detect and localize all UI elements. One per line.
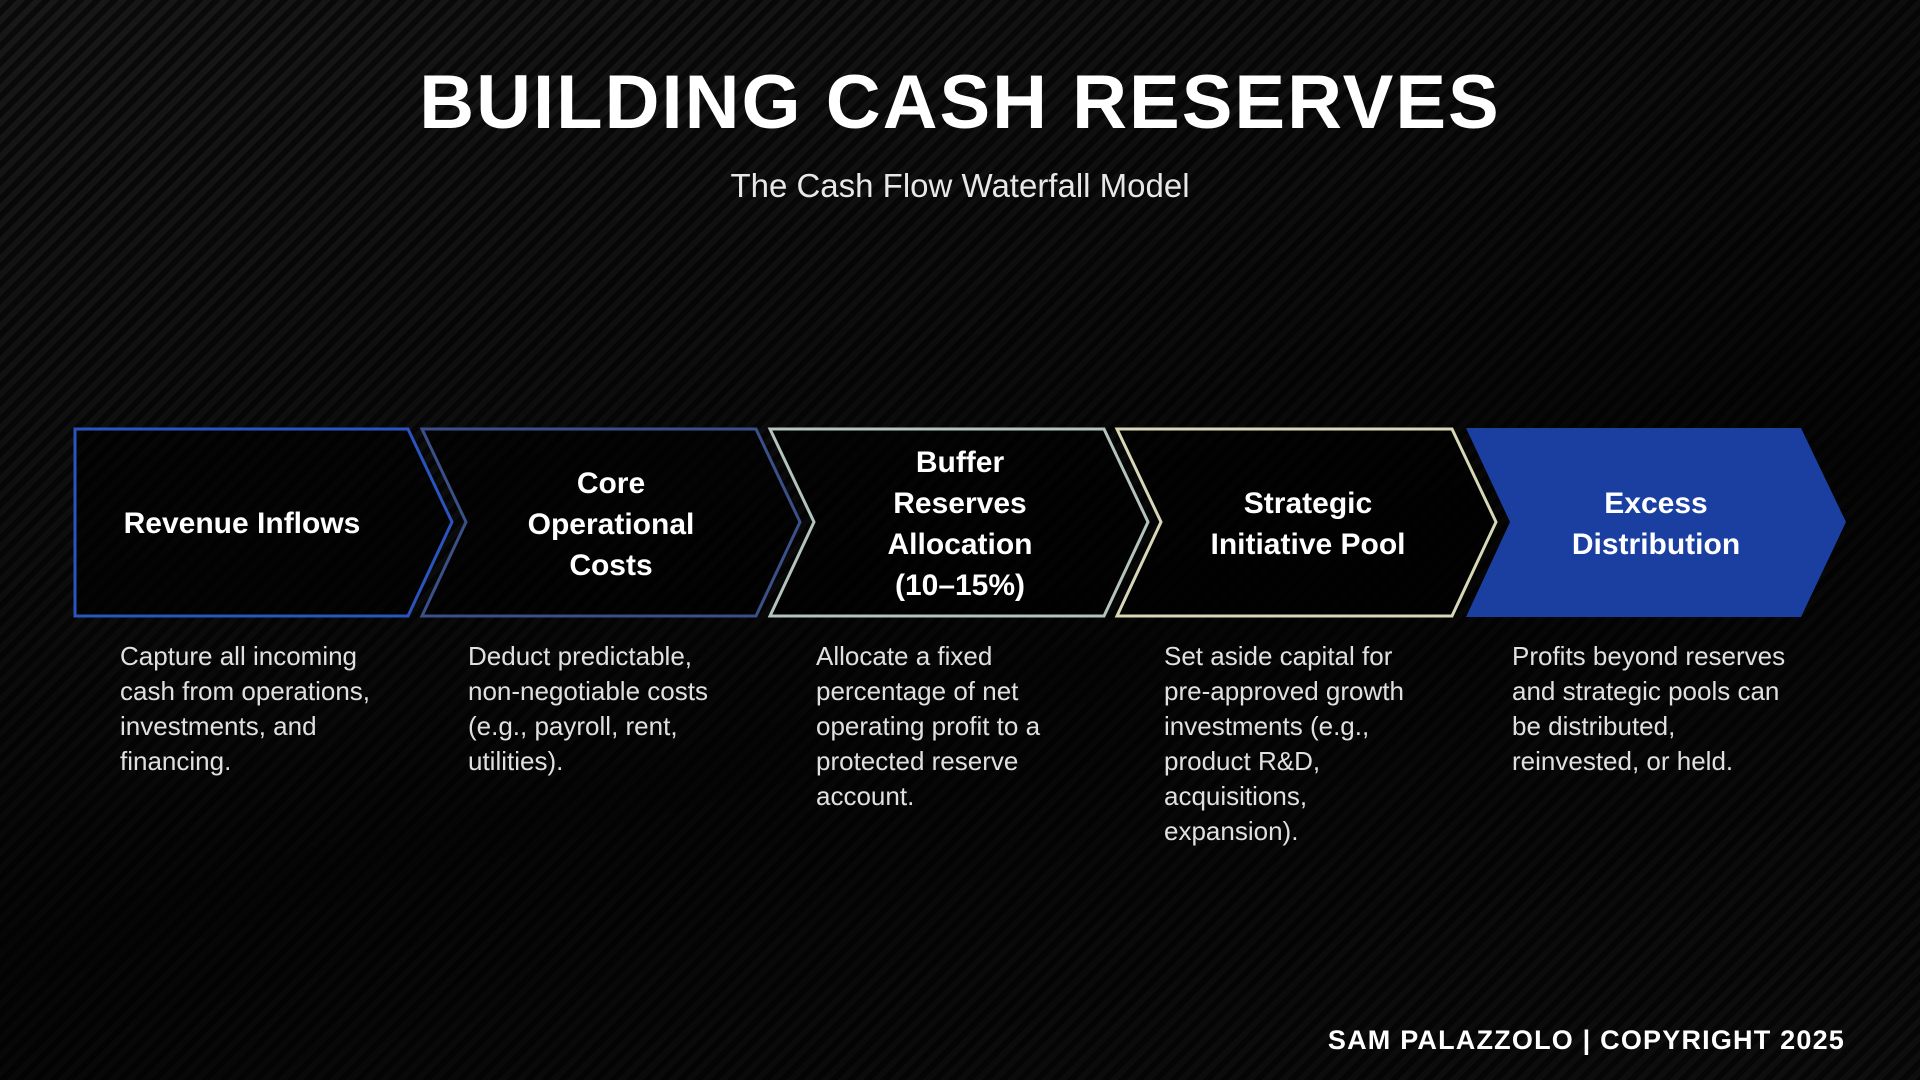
description 2: (e.g., payroll, rent,: [468, 711, 678, 741]
chevron: Excess Distribution: Distribution: [1572, 528, 1740, 561]
description 5: Profits beyond reserves: [1512, 641, 1785, 671]
chevron: Buffer Reserves Allocation: Allocation: [887, 528, 1033, 561]
subtitle: The Cash Flow Waterfall Model: [730, 167, 1190, 204]
description 1: financing.: [120, 746, 231, 776]
description 4: product R&D,: [1164, 746, 1320, 776]
description 4: pre-approved growth: [1164, 676, 1404, 706]
chevron: Strategic Initiative Pool: Strategic: [1244, 487, 1372, 520]
description 4: investments (e.g.,: [1164, 711, 1369, 741]
chevron: Excess Distribution: Excess: [1604, 487, 1708, 520]
chevron: Core Operational Costs: Operational: [528, 508, 694, 541]
chevron: Core Operational Costs: [422, 429, 800, 616]
chevron: Revenue Inflows: Revenue Inflows: [124, 507, 360, 540]
description 4: acquisitions,: [1164, 781, 1307, 811]
description 1: cash from operations,: [120, 676, 370, 706]
description 5: reinvested, or held.: [1512, 746, 1733, 776]
description 4: Set aside capital for: [1164, 641, 1393, 671]
chevron: Core Operational Costs: Core: [577, 467, 645, 500]
description 5: and strategic pools can: [1512, 676, 1779, 706]
description 3: protected reserve: [816, 746, 1018, 776]
description 2: utilities).: [468, 746, 563, 776]
description 3: operating profit to a: [816, 711, 1041, 741]
description 2: Deduct predictable,: [468, 641, 692, 671]
description 3: percentage of net: [816, 676, 1019, 706]
chevron: Buffer Reserves Allocation: Reserves: [893, 487, 1027, 520]
description 1: Capture all incoming: [120, 641, 357, 671]
chevron: Strategic Initiative Pool: [1117, 429, 1496, 616]
chevron: Buffer Reserves Allocation: (10–15%): [895, 569, 1025, 602]
chevron: Strategic Initiative Pool: Initiative Pool: [1210, 528, 1406, 561]
chevron: Buffer Reserves Allocation: Buffer: [916, 446, 1004, 479]
description 5: be distributed,: [1512, 711, 1675, 741]
description 2: non-negotiable costs: [468, 676, 708, 706]
footer: SAM PALAZZOLO | COPYRIGHT 2025: [1328, 1025, 1845, 1055]
chevron: Buffer Reserves Allocation: [770, 429, 1148, 616]
title: BUILDING CASH RESERVES: [419, 60, 1501, 145]
description 3: Allocate a fixed: [816, 641, 992, 671]
chevron: Revenue Inflows: [75, 429, 452, 616]
description 4: expansion).: [1164, 816, 1298, 846]
chevron: Core Operational Costs: Costs: [569, 549, 653, 582]
chevron: Excess Distribution: [1466, 428, 1846, 617]
description 3: account.: [816, 781, 914, 811]
description 1: investments, and: [120, 711, 317, 741]
